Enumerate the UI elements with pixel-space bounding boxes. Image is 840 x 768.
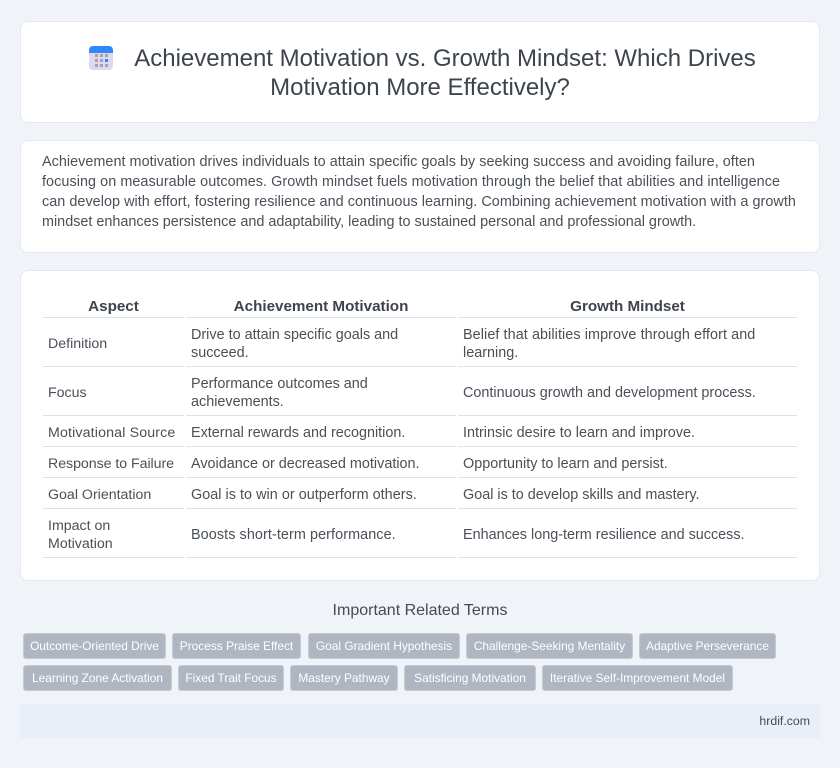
row: response to failure: Avoidance or decreased motivation.	[191, 456, 420, 472]
row: motivational source: Intrinsic desire to learn and improve.	[463, 425, 695, 441]
tag: Process Praise Effect	[180, 639, 293, 653]
panel: header	[20, 21, 820, 123]
tag: Challenge-Seeking Mentality	[474, 639, 625, 653]
footer bar	[20, 704, 820, 738]
tag	[23, 665, 172, 691]
table header row: Aspect	[88, 298, 139, 315]
row: goal orientation: Goal is to win or outperform others.	[191, 487, 417, 503]
row: impact on motivation: Motivation	[48, 536, 113, 552]
row: focus: achievements.	[191, 394, 284, 410]
tag	[404, 665, 536, 691]
icon: calendar	[89, 46, 113, 70]
row: response to failure: Opportunity to learn and persist.	[463, 456, 668, 472]
table header row: Growth Mindset	[570, 298, 685, 315]
tag: Learning Zone Activation	[32, 671, 163, 685]
tag: Goal Gradient Hypothesis	[316, 639, 452, 653]
text block: intro paragraph: focusing on measurable outcomes. Growth mindset fuels motivation through the belief that abilities and intelligence	[42, 174, 780, 190]
row: focus: Focus	[48, 385, 87, 401]
text block: intro paragraph	[42, 154, 796, 230]
tag	[23, 633, 166, 659]
table header row: Achievement Motivation	[234, 298, 408, 315]
tag	[178, 665, 284, 691]
table header row	[88, 298, 685, 315]
row: focus: Continuous growth and development process.	[463, 385, 756, 401]
tag	[466, 633, 633, 659]
row: impact on motivation: Impact on	[48, 518, 110, 534]
tag	[542, 665, 733, 691]
heading: related terms: Important Related Terms	[333, 602, 507, 619]
title: Achievement Motivation vs. Growth Mindset: Which Drives	[134, 45, 756, 72]
title: Motivation More Effectively?	[270, 74, 570, 101]
row: response to failure: Response to Failure	[48, 456, 174, 472]
tag: Satisficing Motivation	[414, 671, 526, 685]
row: goal orientation: Goal Orientation	[48, 487, 151, 503]
row: definition: succeed.	[191, 345, 249, 361]
row: definition: Belief that abilities improve through effort and	[463, 327, 755, 343]
tag: Adaptive Perseverance	[646, 639, 769, 653]
title	[134, 45, 756, 101]
row: goal orientation	[48, 487, 699, 503]
row: impact on motivation: Enhances long-term resilience and success.	[463, 527, 745, 543]
row: motivational source: Motivational Source	[48, 425, 175, 441]
tag: Fixed Trait Focus	[185, 671, 277, 685]
row: definition: Definition	[48, 336, 107, 352]
row: impact on motivation: Boosts short-term performance.	[191, 527, 396, 543]
footer source text: hrdif.com	[759, 714, 810, 728]
text block: intro paragraph: can develop with effort, fostering resilience and continuous learning. Combining achievement motivation with a growth	[42, 194, 796, 210]
text block: intro paragraph: mindset enhances persistence and adaptability, leading to sustained personal and professional growth.	[42, 214, 696, 230]
row: impact on motivation	[48, 518, 745, 552]
tag: Outcome-Oriented Drive	[30, 639, 159, 653]
row: motivational source	[48, 425, 695, 441]
tag	[308, 633, 460, 659]
text block: intro paragraph: Achievement motivation drives individuals to attain specific goals by seeking success and avoiding failure, often	[42, 154, 755, 170]
row: definition: learning.	[463, 345, 518, 361]
row: response to failure	[48, 456, 668, 472]
panel: comparison table	[20, 270, 820, 581]
row: focus: Performance outcomes and	[191, 376, 368, 392]
row: goal orientation: Goal is to develop skills and mastery.	[463, 487, 699, 503]
row: motivational source: External rewards and recognition.	[191, 425, 405, 441]
tag	[172, 633, 301, 659]
tag: Mastery Pathway	[298, 671, 390, 685]
row: focus	[48, 376, 756, 410]
row: definition: Drive to attain specific goals and	[191, 327, 398, 343]
table: comparison	[43, 298, 797, 558]
panel: intro text	[20, 140, 820, 253]
tag	[290, 665, 398, 691]
tag: Iterative Self-Improvement Model	[550, 671, 725, 685]
tags: related terms	[23, 633, 776, 691]
tag	[639, 633, 776, 659]
row: definition	[48, 327, 755, 361]
